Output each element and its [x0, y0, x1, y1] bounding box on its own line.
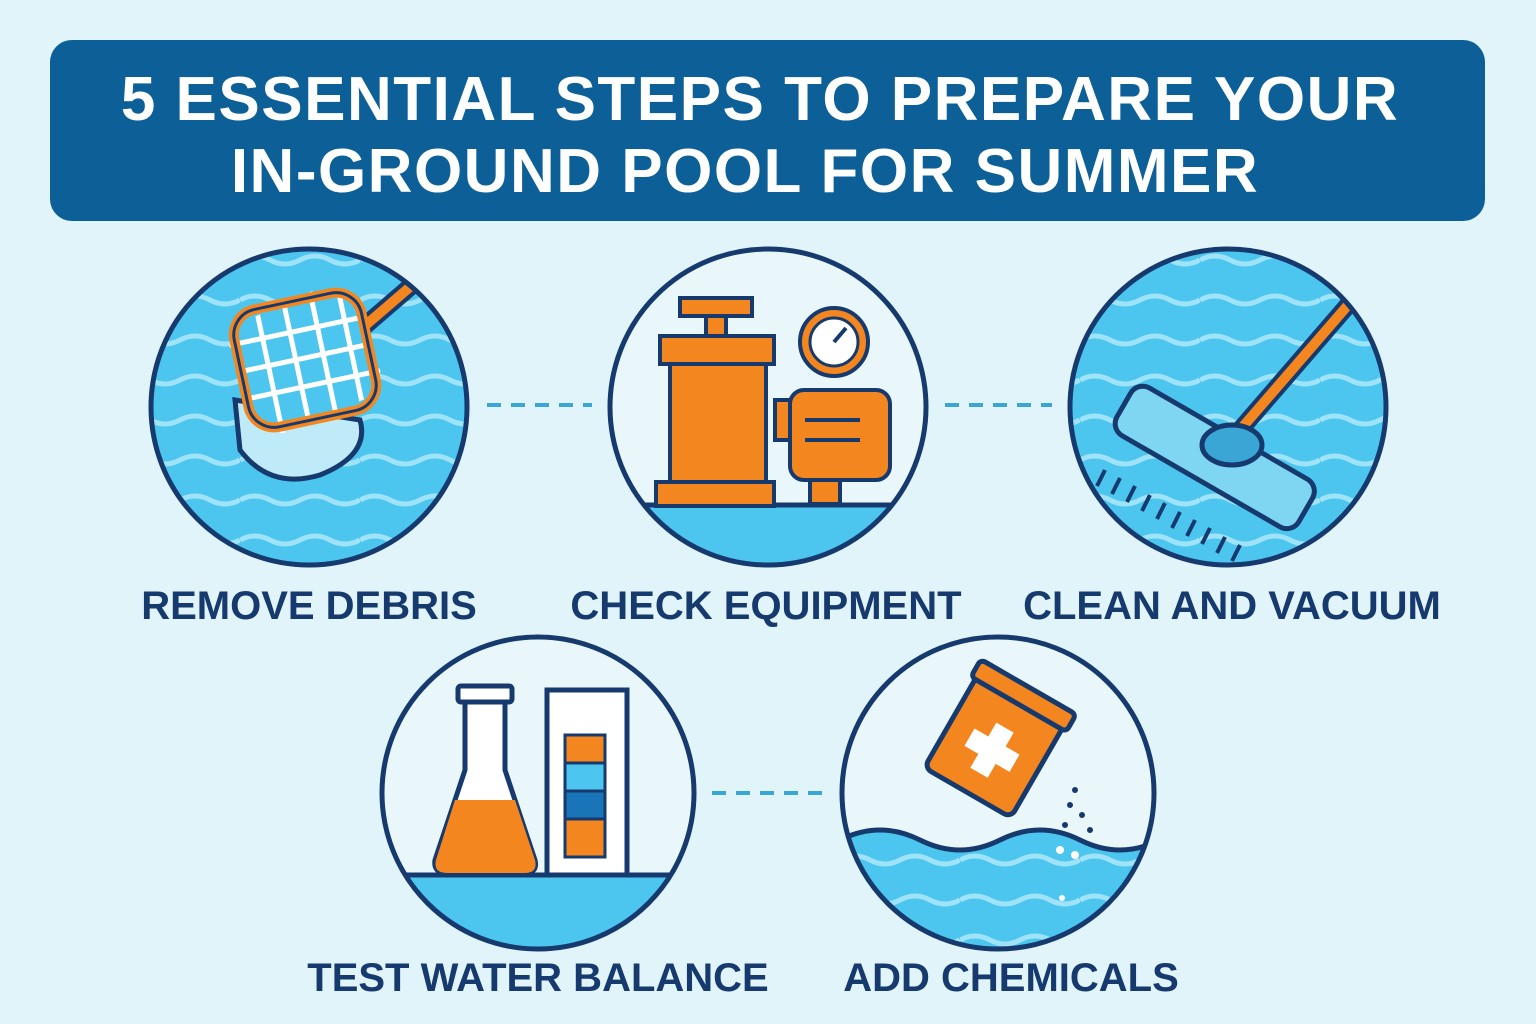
label: remove debris: REMOVE DEBRIS	[141, 584, 477, 628]
step 5: add chemicals icon	[840, 637, 1160, 960]
label: check equipment: CHECK EQUIPMENT	[570, 584, 962, 628]
step 2: check equipment icon	[600, 249, 940, 575]
connector 1-2	[487, 403, 592, 407]
title banner	[50, 40, 1485, 221]
step 1: remove debris icon	[151, 249, 467, 565]
title banner: IN-GROUND POOL FOR SUMMER	[231, 137, 1259, 206]
label: clean and vacuum: CLEAN AND VACUUM	[1023, 584, 1441, 628]
title banner: 5 ESSENTIAL STEPS TO PREPARE YOUR	[121, 65, 1399, 134]
label: test water balance: TEST WATER BALANCE	[307, 956, 769, 1000]
step 4: test water balance icon	[370, 637, 710, 955]
label: add chemicals: ADD CHEMICALS	[843, 956, 1179, 1000]
step 3: clean and vacuum icon	[1070, 249, 1386, 565]
connector 2-3	[945, 403, 1052, 407]
connector 4-5	[712, 791, 828, 795]
